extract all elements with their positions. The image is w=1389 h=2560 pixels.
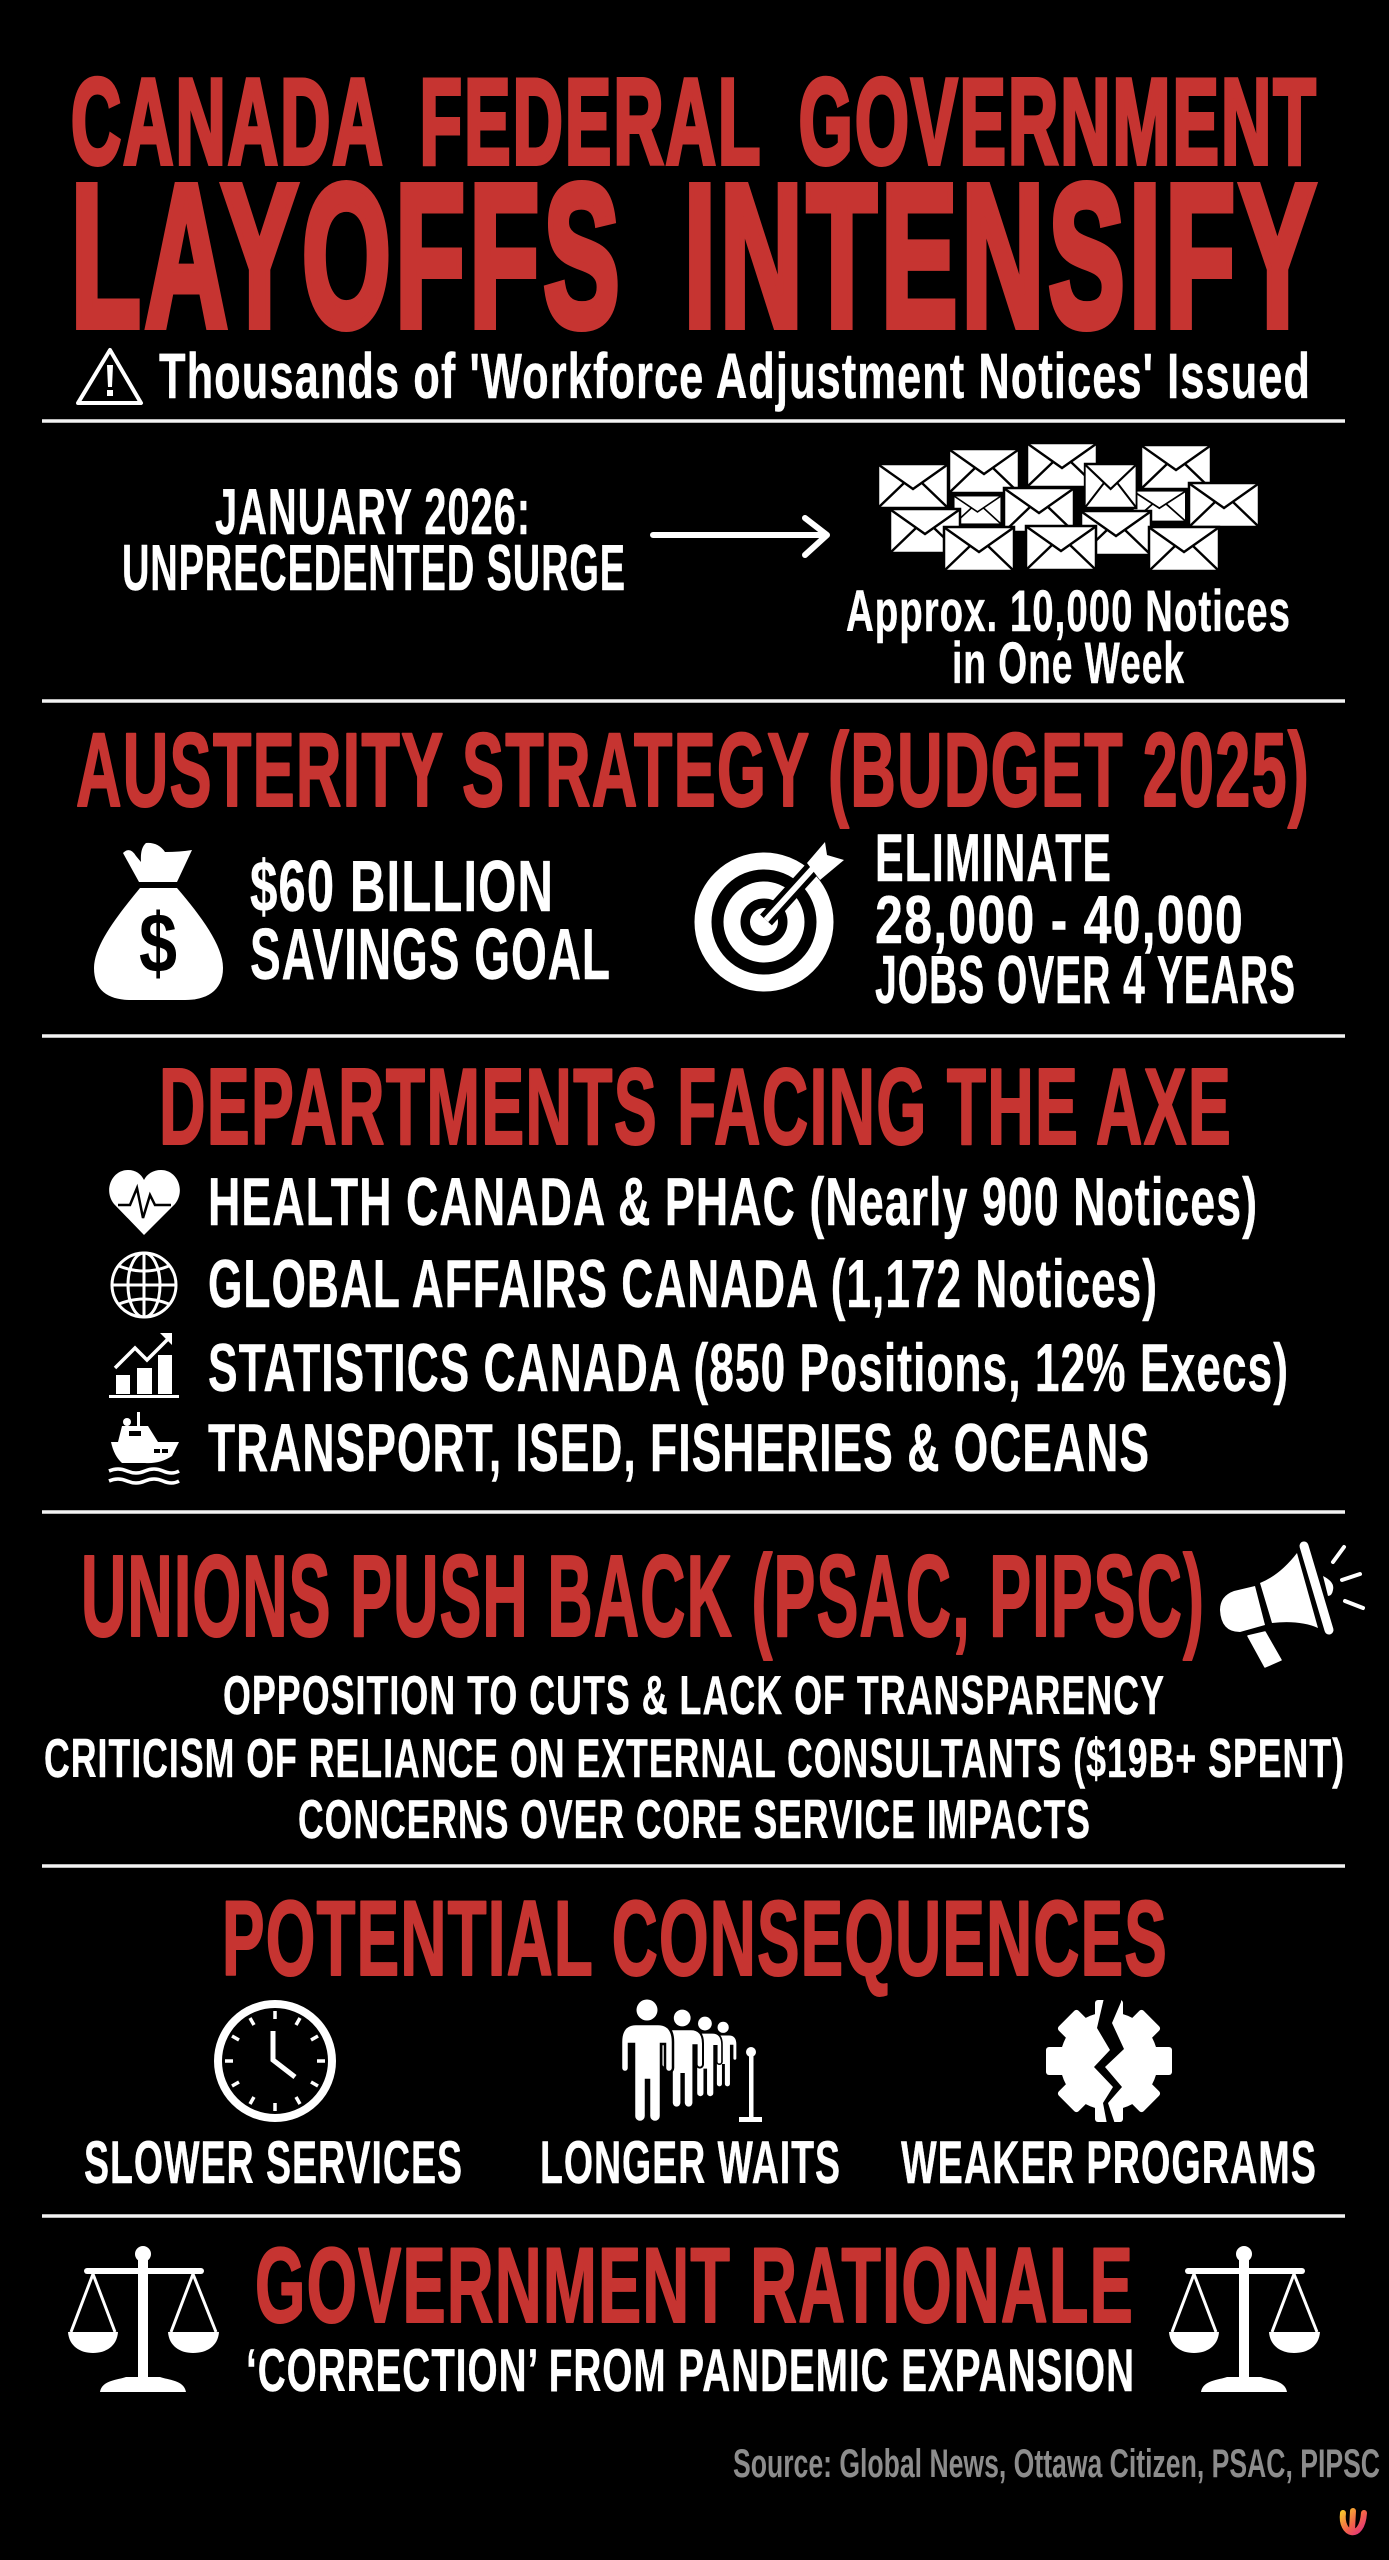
icon: corner logo [1343,2511,1364,2532]
label: longer waits: LONGER WAITS [540,2129,841,2196]
icon: money bag [94,843,223,1000]
job cuts text [875,820,1296,1018]
icon: clock [218,2004,332,2118]
surge text: JANUARY 2026: [215,475,531,548]
savings goal text: $60 BILLION [250,847,554,927]
icon: heart with pulse [109,1170,180,1235]
notices text [846,579,1291,696]
job cuts text: 28,000 - 40,000 [875,882,1244,958]
panel: title block [71,54,1320,412]
savings goal text: SAVINGS GOAL [250,915,611,995]
icon: globe [112,1253,176,1317]
icon: broken gear [1046,1998,1172,2124]
surge text [122,475,626,604]
label: slower services: SLOWER SERVICES [84,2129,463,2196]
icon: envelopes pile [878,443,1259,571]
panel: unions push back [44,1531,1363,1850]
notices text: in One Week [952,631,1185,696]
icon: people queue [621,2000,762,2122]
panel: government rationale [68,2225,1320,2404]
icon: scales right [1169,2246,1320,2392]
icon: target with arrow [703,842,844,983]
icon: warning triangle [78,350,141,403]
icon: ship on waves [109,1412,179,1483]
icon: scales left [68,2246,219,2392]
surge text: UNPRECEDENTED SURGE [122,531,626,604]
panel: austerity strategy [76,712,1310,1018]
panel: departments [109,1046,1289,1486]
union points [44,1664,1345,1850]
job cuts text: ELIMINATE [875,820,1112,896]
panel: potential consequences [84,1878,1317,2196]
icon: money bag: $ [139,896,177,990]
savings goal text [250,847,611,995]
panel: January surge [122,443,1291,696]
arrow [653,518,827,555]
icon: megaphone [1220,1546,1363,1667]
icon: statistics chart [109,1333,179,1398]
